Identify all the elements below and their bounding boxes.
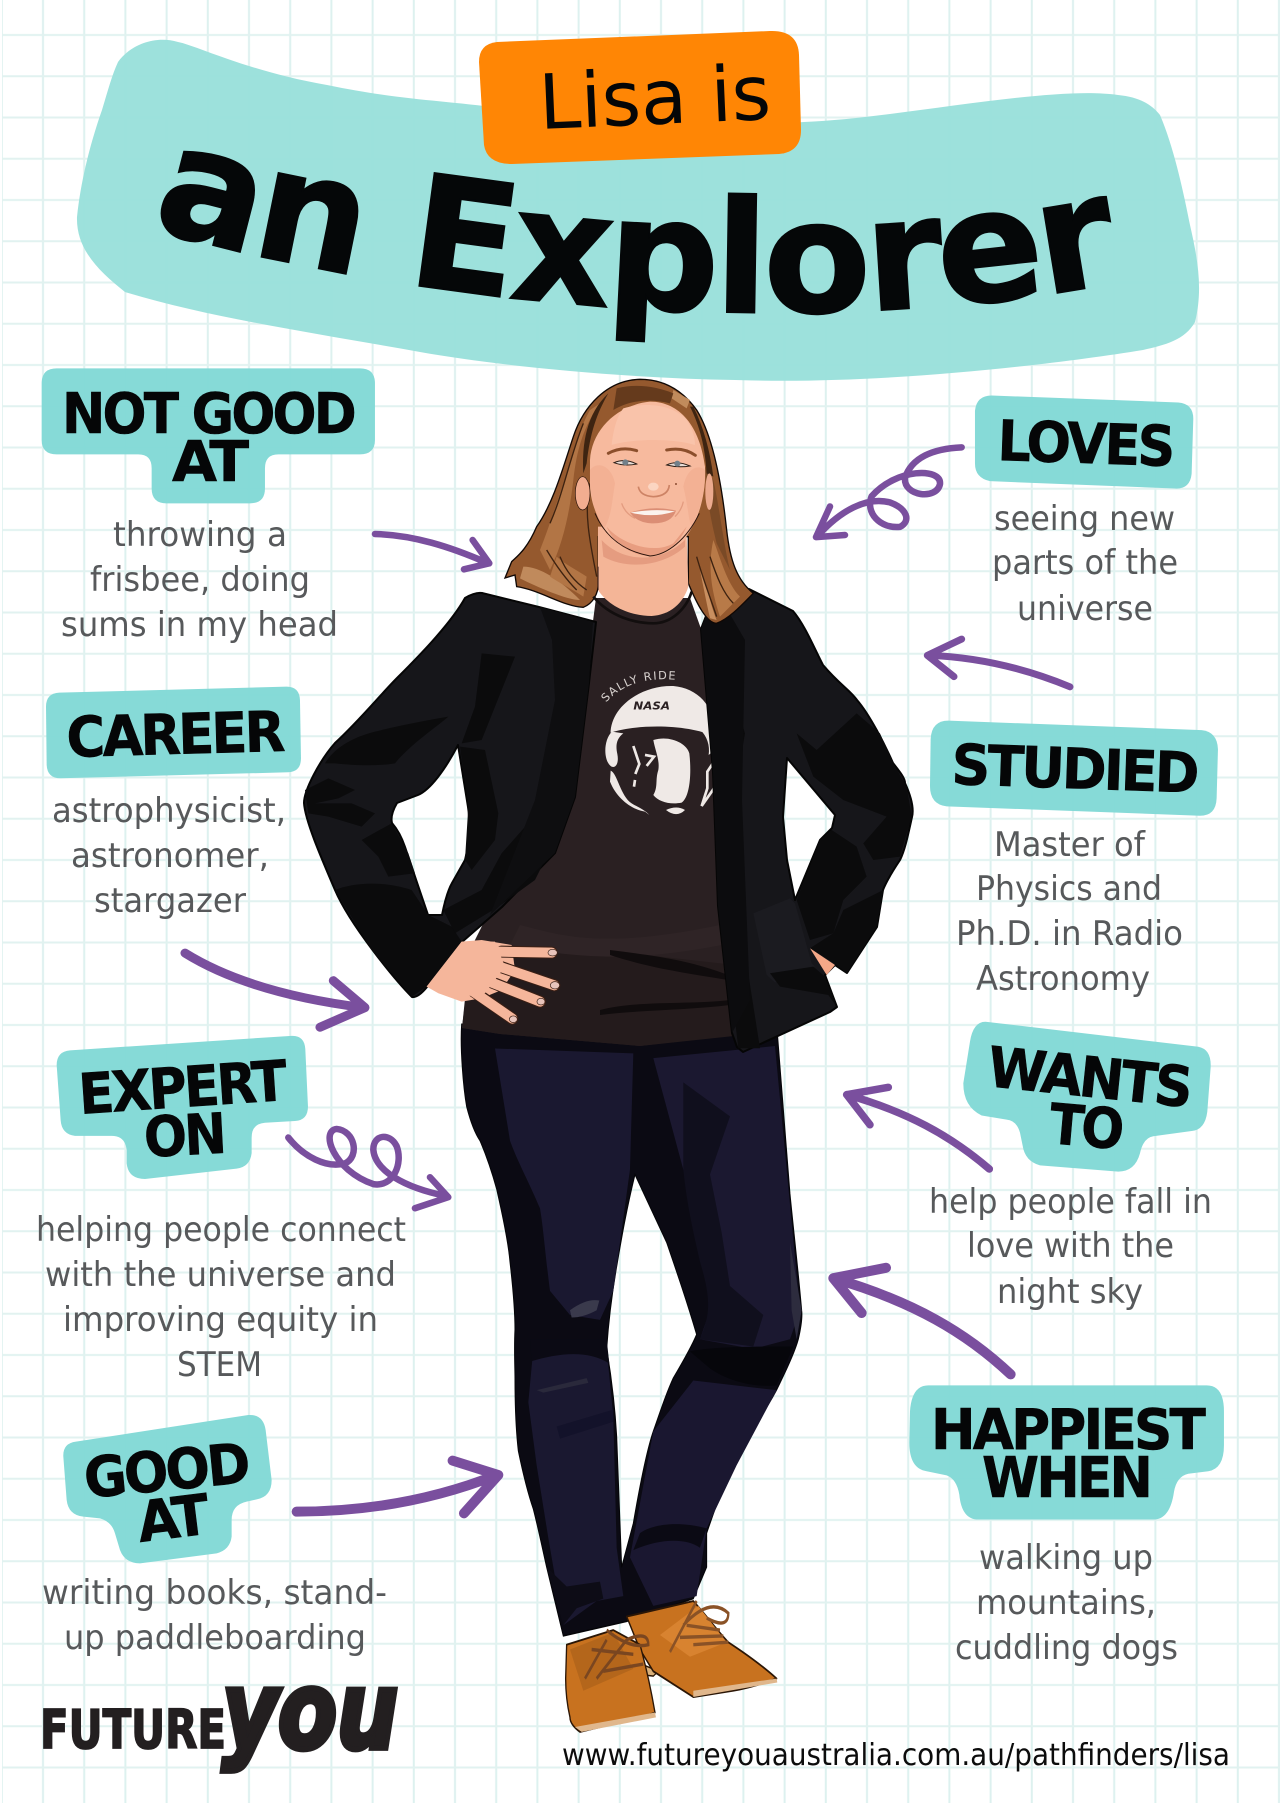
title banner	[77, 40, 1200, 381]
label: expert on	[57, 1036, 308, 1179]
text: not good at: sums in my head	[61, 605, 338, 645]
logo: Future You	[40, 1648, 398, 1774]
arrow: happiest when	[833, 1268, 1011, 1374]
nose	[638, 485, 669, 497]
arrow: good at	[297, 1461, 498, 1513]
text: wants to: love with the	[967, 1226, 1174, 1266]
label: wants to: TO	[1047, 1092, 1125, 1163]
text: happiest when: mountains,	[976, 1583, 1156, 1623]
label: loves	[975, 396, 1193, 489]
text: wants to: help people fall in	[929, 1182, 1212, 1222]
text: happiest when: cuddling dogs	[955, 1628, 1178, 1668]
text: career: astrophysicist,	[52, 791, 286, 831]
text: loves: universe	[1017, 589, 1153, 629]
text: wants to: night sky	[997, 1272, 1143, 1312]
logo: Future You: you	[222, 1648, 398, 1774]
heading: an Explorer: an Explorer	[160, 150, 1112, 342]
t-shirt	[462, 598, 732, 1046]
label: good at: GOOD	[81, 1431, 251, 1512]
text: happiest when: walking up	[979, 1538, 1153, 1578]
eyes	[614, 461, 637, 465]
label: not good at: AT	[172, 430, 249, 495]
orange tag: Lisa is	[479, 31, 801, 164]
text: studied: Physics and	[976, 869, 1162, 909]
label: not good at: NOT GOOD	[62, 382, 354, 447]
text: not good at: throwing a	[113, 515, 287, 555]
text: happiest when	[955, 1538, 1178, 1668]
text: expert on: helping people connect	[36, 1210, 406, 1250]
face	[590, 402, 705, 555]
text: good at: writing books, stand-	[42, 1573, 387, 1613]
hair	[505, 379, 753, 623]
hand in pocket	[810, 948, 835, 975]
blazer	[304, 589, 913, 1052]
logo: Future You: FUTURE	[40, 1699, 226, 1761]
label: happiest when: WHEN	[982, 1446, 1150, 1511]
label: good at	[63, 1415, 272, 1563]
arrow: career	[185, 953, 365, 1027]
label: happiest when	[909, 1385, 1224, 1520]
shirt print: Sally Ride	[601, 671, 713, 815]
blazer shadows	[305, 653, 562, 997]
arrow: not good at	[375, 534, 489, 569]
text: good at	[42, 1573, 387, 1658]
text: expert on: with the universe and	[45, 1255, 396, 1295]
label: good at: AT	[134, 1483, 213, 1556]
label: happiest when: HAPPIEST	[931, 1398, 1206, 1463]
text: expert on: improving equity in	[63, 1300, 378, 1340]
text: studied: Astronomy	[976, 959, 1150, 999]
label: loves: LOVES	[997, 409, 1174, 480]
shoes	[566, 1601, 777, 1732]
text: expert on: STEM	[177, 1345, 262, 1385]
text: not good at	[61, 515, 338, 645]
label: career: CAREER	[66, 700, 285, 771]
text: studied: Ph.D. in Radio	[956, 914, 1183, 954]
text: studied	[956, 825, 1183, 999]
hand on hip	[427, 940, 560, 1023]
label: expert on: ON	[142, 1102, 226, 1171]
arrow: loves	[816, 447, 962, 537]
person illustration	[264, 378, 953, 1733]
label: studied: STUDIED	[951, 733, 1198, 807]
text: not good at: frisbee, doing	[90, 560, 310, 600]
orange tag: Lisa is: Lisa is	[537, 48, 773, 147]
label: wants to	[963, 1022, 1211, 1172]
text: expert on	[36, 1210, 406, 1385]
shirt collar	[593, 592, 692, 623]
text: wants to	[929, 1182, 1212, 1312]
shirt print: Sally Ride: NASA	[633, 700, 670, 712]
text: loves: seeing new	[994, 499, 1175, 539]
shirt print: Sally Ride: SALLY RIDE	[601, 671, 675, 702]
ears	[575, 477, 590, 510]
text: loves	[992, 499, 1178, 629]
lapel edges	[490, 607, 593, 915]
eyebrows	[608, 449, 695, 455]
label: not good at	[42, 368, 375, 503]
label: wants to: WANTS	[985, 1035, 1193, 1121]
neck	[598, 527, 688, 616]
text: good at: up paddleboarding	[64, 1618, 366, 1658]
text: loves: parts of the	[992, 543, 1178, 583]
arrow: expert on	[288, 1129, 448, 1208]
trousers	[461, 1024, 802, 1636]
text: career: astronomer,	[71, 836, 269, 876]
label: expert on: EXPERT	[77, 1049, 289, 1128]
smile	[630, 508, 676, 523]
website url: www.futureyouaustralia.com.au/pathfinders/lisa	[562, 1738, 1230, 1773]
label: studied	[930, 721, 1218, 816]
arrow: studied	[927, 639, 1070, 687]
head and hair	[505, 379, 753, 623]
text: career: stargazer	[94, 881, 246, 921]
text: studied: Master of	[994, 825, 1146, 865]
arrow: wants to	[847, 1087, 989, 1169]
text: career	[52, 791, 286, 921]
